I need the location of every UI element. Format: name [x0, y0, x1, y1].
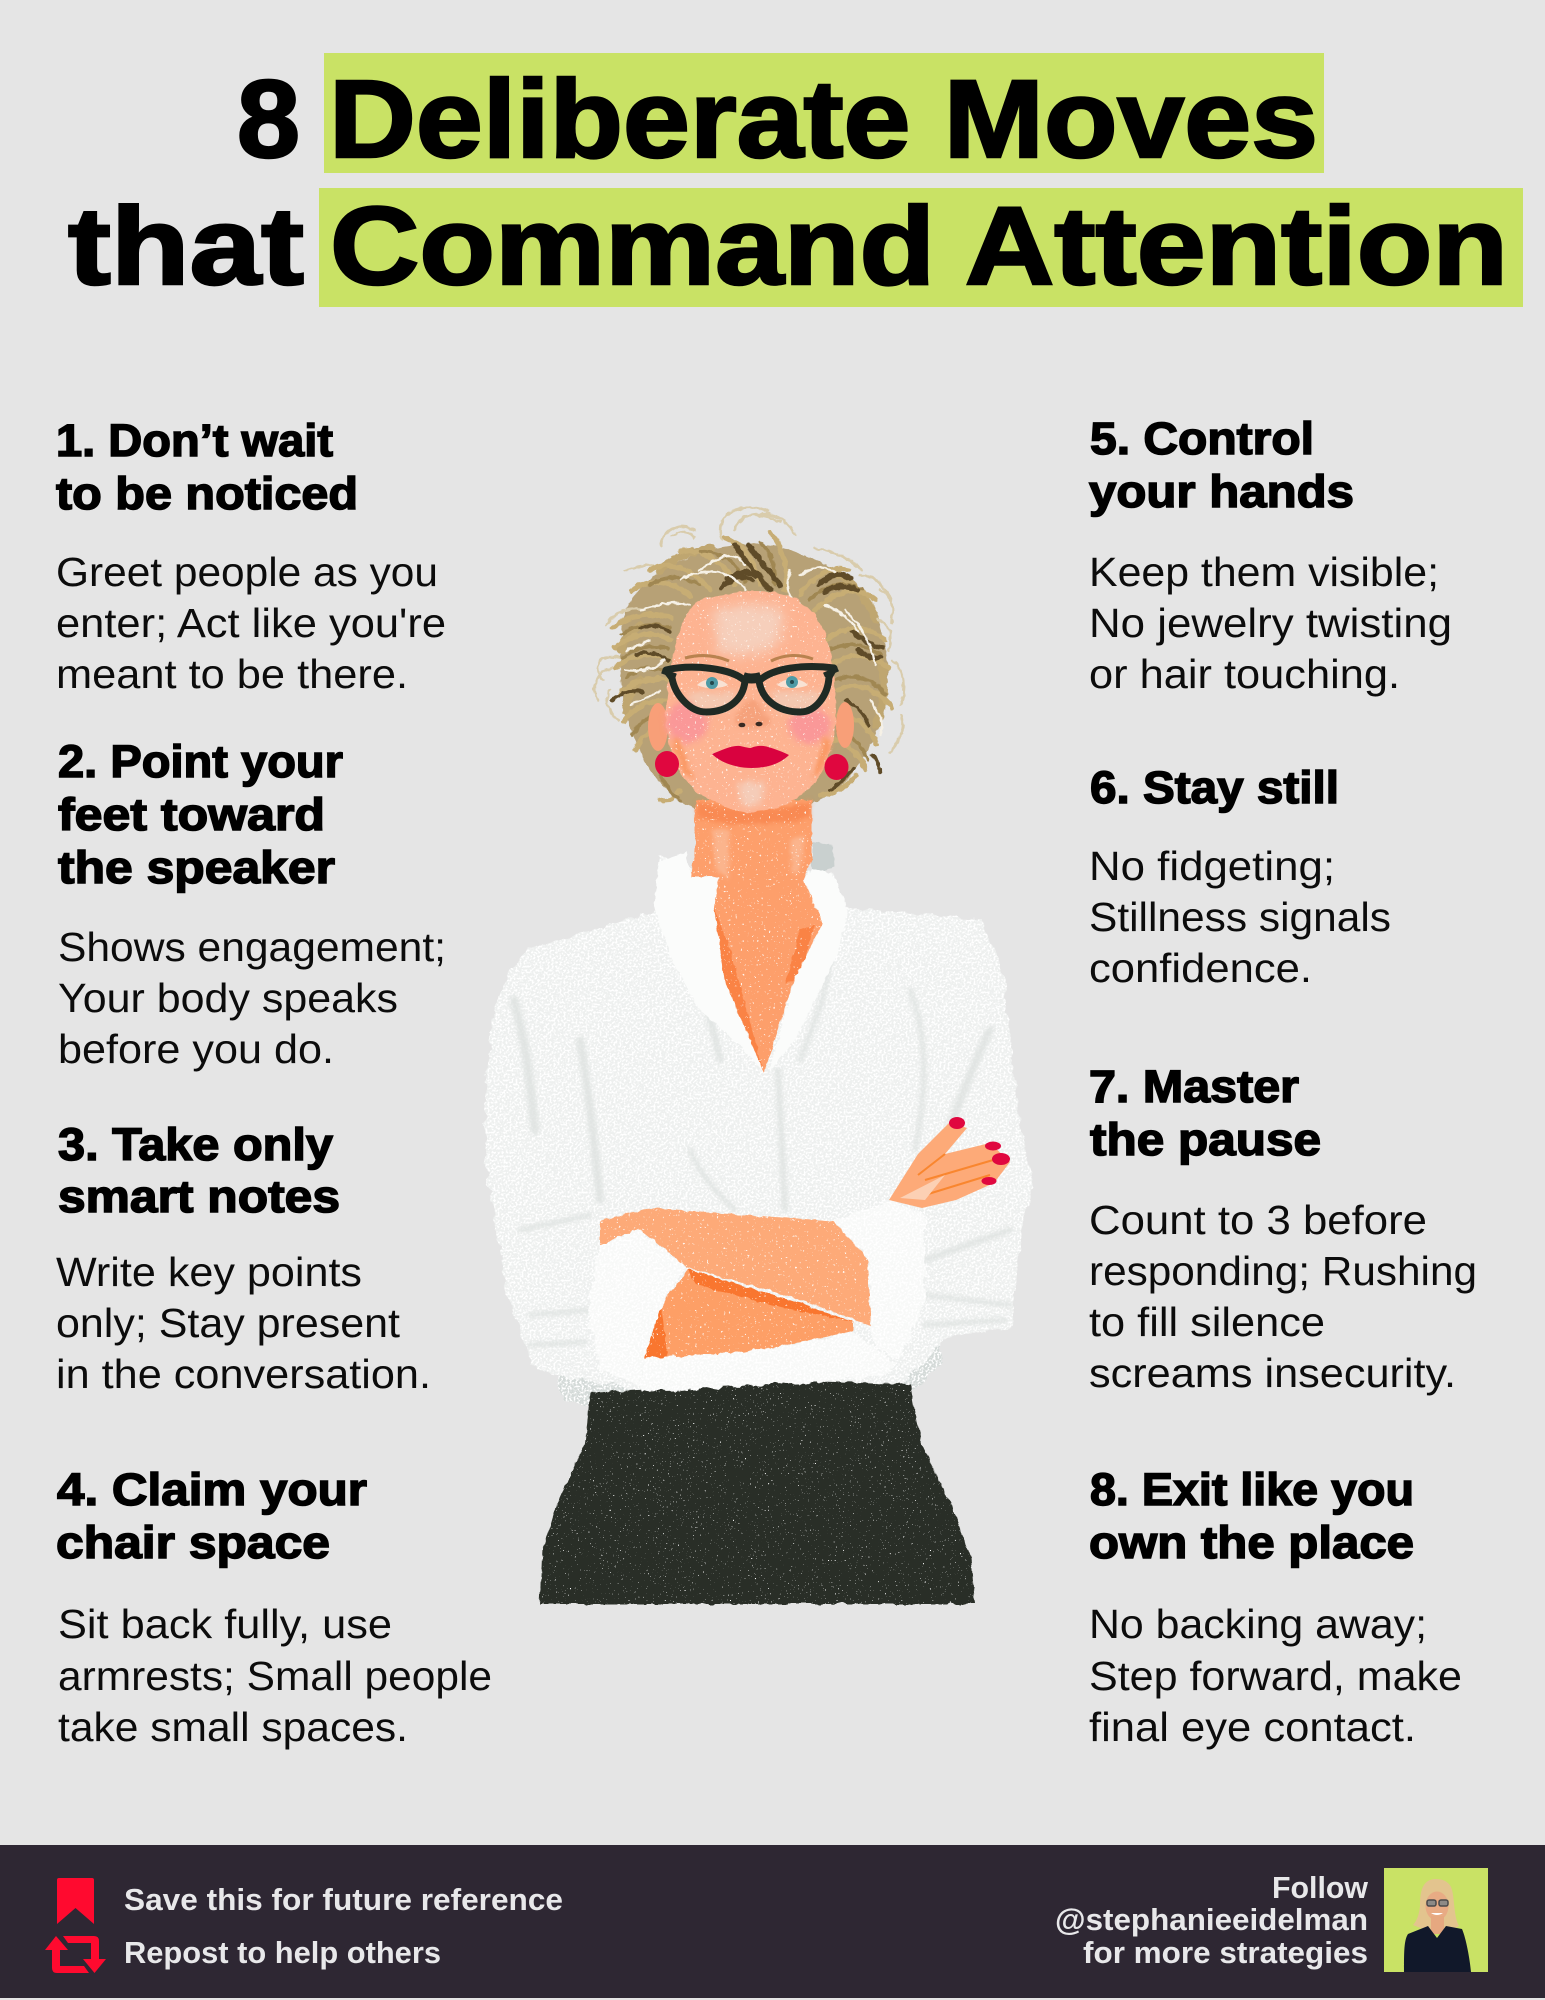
body: move 7 — [1089, 1197, 1477, 1396]
footer: repost call to action — [45, 1935, 441, 1973]
panel: move 6 — [1089, 762, 1391, 991]
footer: save call to action — [57, 1878, 563, 1924]
heading: move 2: feet toward — [58, 789, 325, 840]
illustration: hair — [594, 507, 904, 810]
body: move 1: meant to be there. — [56, 651, 408, 697]
body: move 4: Sit back fully, use — [58, 1601, 392, 1647]
body: move 3: in the conversation. — [56, 1351, 431, 1397]
footer: follow text: Follow — [1272, 1870, 1369, 1905]
heading: move 8: 8. Exit like you — [1090, 1464, 1414, 1515]
illustration: fingernails — [949, 1117, 1010, 1185]
body: move 7: Count to 3 before — [1089, 1197, 1427, 1243]
illustration: woman with crossed arms — [485, 507, 1033, 1604]
heading: move 5: your hands — [1089, 466, 1354, 517]
body: move 7: to fill silence — [1089, 1299, 1325, 1345]
body: move 2: Shows engagement; — [58, 924, 446, 970]
author photo — [1384, 1868, 1488, 1972]
illustration: skirt — [540, 1381, 975, 1604]
footer: follow text — [1055, 1870, 1369, 1970]
save text: Save this for future reference — [124, 1882, 563, 1917]
heading: move 3: smart notes — [58, 1171, 340, 1222]
title text: line 1 number: 8 — [237, 58, 300, 181]
body: move 4: take small spaces. — [58, 1704, 408, 1750]
body: move 5: or hair touching. — [1089, 651, 1400, 697]
title — [68, 53, 1523, 308]
illustration: nostrils — [738, 722, 762, 727]
icon: bookmark — [57, 1878, 94, 1924]
body: move 5: No jewelry twisting — [1089, 600, 1452, 646]
illustration: shirt hem — [640, 1332, 895, 1392]
footer bar — [0, 1845, 1545, 1998]
footer: follow text: @stephanieeidelman — [1055, 1902, 1368, 1937]
heading: move 8 — [1089, 1464, 1414, 1568]
body: move 6 — [1089, 843, 1391, 991]
heading: move 7 — [1089, 1061, 1321, 1165]
body: move 1: Greet people as you — [56, 549, 438, 595]
title text: that: that — [68, 185, 304, 308]
body: move 2: Your body speaks — [58, 975, 398, 1021]
heading: move 2: the speaker — [58, 842, 335, 893]
heading: move 3 — [58, 1119, 340, 1222]
illustration: ears — [648, 702, 854, 751]
heading: move 4 — [56, 1464, 367, 1568]
heading: move 6: 6. Stay still — [1090, 762, 1339, 813]
panel: move 2 — [58, 736, 446, 1072]
body: move 3: Write key points — [56, 1249, 362, 1295]
heading: move 2 — [58, 736, 343, 893]
illustration: left earring — [655, 751, 679, 777]
heading: move 3: 3. Take only — [58, 1119, 333, 1170]
title text: Command Attention: Command Attention — [330, 185, 1508, 308]
heading: move 4: chair space — [56, 1517, 330, 1568]
icon: repost arrows — [45, 1936, 106, 1973]
footer: follow text: for more strategies — [1083, 1935, 1368, 1970]
panel: move 8 — [1089, 1464, 1462, 1750]
body: move 2: before you do. — [58, 1026, 334, 1072]
body: move 4 — [58, 1601, 492, 1750]
body: move 7: screams insecurity. — [1089, 1350, 1456, 1396]
illustration: right cuff — [834, 1200, 925, 1360]
illustration: collar — [654, 852, 848, 1073]
panel: move 4 — [56, 1464, 492, 1750]
panel: move 1 — [56, 415, 446, 697]
illustration: hand — [889, 1117, 1010, 1208]
illustration: right earring — [824, 754, 848, 780]
illustration: glasses — [662, 667, 838, 712]
heading: move 7: the pause — [1090, 1114, 1321, 1165]
illustration: eyes — [697, 676, 808, 689]
illustration: face — [648, 591, 854, 812]
heading: move 7: 7. Master — [1089, 1061, 1299, 1112]
heading: move 4: 4. Claim your — [57, 1464, 367, 1515]
body: move 8 — [1089, 1601, 1462, 1750]
illustration: left cuff — [588, 1229, 686, 1385]
heading: move 1: to be noticed — [56, 468, 358, 519]
body: move 8: No backing away; — [1089, 1601, 1427, 1647]
panel: move 5 — [1089, 413, 1452, 697]
title highlight: line 1 — [324, 53, 1324, 173]
heading: move 8: own the place — [1089, 1517, 1414, 1568]
illustration: shirt — [485, 857, 1033, 1406]
illustration: neck and chest — [691, 800, 823, 1073]
body: move 3: only; Stay present — [56, 1300, 401, 1346]
illustration: shirt shadow behind collar — [812, 842, 834, 875]
body: move 7: responding; Rushing — [1089, 1248, 1477, 1294]
body: move 6: Stillness signals — [1089, 894, 1391, 940]
heading: move 1: 1. Don’t wait — [56, 415, 333, 466]
heading: move 5 — [1089, 413, 1354, 517]
body: move 2 — [58, 924, 446, 1072]
panel: move 7 — [1089, 1061, 1477, 1396]
title text: Deliberate Moves: Deliberate Moves — [329, 58, 1318, 181]
illustration: lips — [712, 746, 789, 768]
body: move 6: confidence. — [1089, 945, 1312, 991]
title highlight: line 2 — [319, 188, 1523, 307]
body: move 3 — [56, 1249, 431, 1397]
illustration: face shape — [666, 591, 836, 812]
panel: move 3 — [56, 1119, 431, 1397]
illustration: shirt folds and shading — [514, 950, 1010, 1345]
body: move 5 — [1089, 549, 1452, 697]
body: move 8: final eye contact. — [1089, 1704, 1416, 1750]
heading: move 5: 5. Control — [1090, 413, 1314, 464]
illustration: eyebrows — [685, 655, 813, 661]
heading: move 2: 2. Point your — [58, 736, 343, 787]
illustration: arms — [600, 1208, 871, 1360]
heading: move 1 — [56, 415, 358, 519]
repost text: Repost to help others — [124, 1935, 441, 1970]
body: move 1 — [56, 549, 446, 697]
body: move 6: No fidgeting; — [1089, 843, 1335, 889]
body: move 1: enter; Act like you're — [56, 600, 446, 646]
body: move 8: Step forward, make — [1089, 1653, 1462, 1699]
body: move 4: armrests; Small people — [58, 1653, 492, 1699]
body: move 5: Keep them visible; — [1089, 549, 1439, 595]
